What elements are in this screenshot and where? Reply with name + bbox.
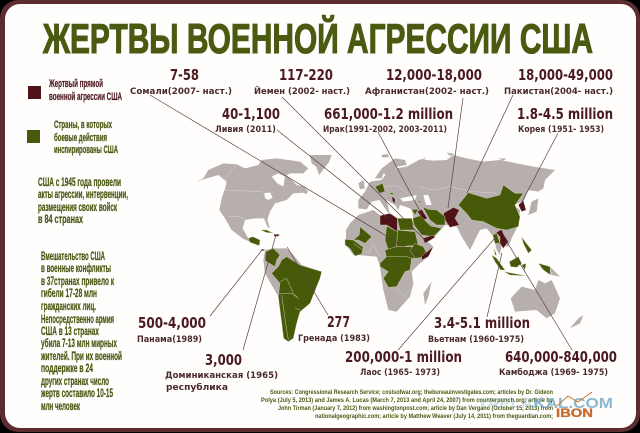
label: Dominican Republic: 3,000 [205, 351, 242, 369]
label: Yemen [254, 66, 350, 97]
label: Grenada: Гренада (1983) [298, 334, 370, 344]
map: South America [263, 248, 322, 342]
label: Libya: Ливия (2011) [215, 125, 276, 135]
world map [197, 153, 583, 342]
watermark: IBON [556, 406, 593, 420]
label: Afghanistan: 12,000-18,000 [386, 66, 482, 84]
text block: casualties summary: жертв составило 10-15 [40, 386, 113, 400]
legend text: direct aggression [48, 78, 122, 103]
legend text: inspired conflicts: инспирированы США [54, 144, 118, 156]
text block: acts of aggression: США с 1945 года провели [38, 175, 121, 189]
sources: John Tirman (January 7, 2012) from washingtonpost.com; article by Dan Vergano (October 15, 2013) from [278, 406, 553, 412]
legend swatch: direct aggression [28, 86, 41, 99]
label: Cambodia [499, 348, 617, 378]
text block: casualties summary: других странах число [41, 374, 109, 388]
map: North and Central America [197, 155, 332, 251]
legend text: direct aggression: военной агрессии США [49, 91, 122, 103]
sources: nationalgeographic.com; article by Matthew Weaver (July 14, 2011) from theguardian.com; [315, 414, 553, 420]
text block: casualties summary: жителей. При их военной [40, 349, 122, 363]
label: Libya: 40-1,100 [222, 105, 280, 123]
label: Dominican Republic: республика [166, 382, 228, 393]
sources [261, 390, 554, 420]
label: Somalia [130, 66, 232, 97]
label: Laos: 200,000-1 million [345, 348, 462, 366]
label: Yemen: 117-220 [279, 66, 333, 84]
label: Vietnam: 3.4-5.1 million [434, 314, 530, 332]
legend swatch: inspired conflicts [27, 130, 40, 143]
text block: casualties summary: убила 7-13 млн мирных [41, 336, 117, 350]
label: Libya [215, 105, 280, 135]
label: Laos: Лаос (1965- 1973) [360, 368, 440, 378]
legend text: inspired conflicts: боевые действия [54, 132, 107, 144]
map: Eurasia [358, 153, 555, 255]
label: Iraq: 661,000-1.2 million [324, 105, 453, 123]
text block: acts of aggression: в 84 странах [38, 212, 83, 226]
label: Afghanistan: Афганистан(2002- наст.) [365, 87, 489, 97]
watermark: YAPLA KAL.COM [477, 395, 613, 412]
label: Iraq: Ирак(1991-2002, 2003-2011) [323, 125, 447, 135]
label: Korea: Корея (1951- 1953) [518, 125, 604, 135]
legend text: direct aggression: Жертвый прямой [48, 78, 103, 90]
label: Vietnam [428, 314, 530, 345]
text block: casualties summary: США в 13 странах [41, 324, 99, 338]
text block: casualties summary: Вмешательство США [41, 249, 105, 263]
label: Cambodia: Камбоджа (1969- 1975) [499, 367, 608, 378]
text block: casualties summary: гибели 17-28 млн [41, 286, 97, 300]
label: Panama: Панама(1989) [137, 335, 202, 345]
label: Somalia: Сомали(2007- наст.) [130, 87, 232, 97]
legend [27, 78, 122, 156]
label: Pakistan: 18,000-49,000 [518, 66, 613, 84]
label: Grenada: 277 [327, 313, 350, 331]
text block: casualties summary [40, 249, 122, 413]
text block: casualties summary: поддержке в 24 [41, 361, 93, 375]
label: Somalia: 7-58 [170, 66, 199, 84]
text block: casualties summary: млн человек [41, 399, 81, 413]
label: Afghanistan [365, 66, 489, 97]
text block: casualties summary: в военные конфликты [41, 261, 111, 275]
text block: acts of aggression: акты агрессии, интервенции, [38, 187, 128, 201]
label: Dominican Republic [165, 351, 278, 393]
label: Yemen: Йемен (2002- наст.) [254, 85, 350, 97]
label: Iraq [323, 105, 453, 135]
text block: acts of aggression [38, 175, 128, 226]
sources: Sources: Congressional Research Service; costsofwar.org; thebureauinvestigates.com; articles by Dr. Gideon [270, 390, 553, 396]
leader lines [150, 95, 572, 350]
label: Grenada [298, 313, 370, 344]
map: Southeast Asia and Oceania [492, 229, 583, 328]
label: Pakistan: Пакистан(2004- наст.) [504, 87, 613, 97]
sources: Polya (July 5, 2013) and James A. Lucas (March 7, 2013 and April 24, 2007) from counterpunch.org; article by [261, 398, 554, 404]
legend text: inspired conflicts [54, 119, 118, 156]
label: Korea [517, 105, 613, 135]
watermark [477, 392, 613, 420]
label: Laos [345, 348, 462, 378]
label: Korea: 1.8-4.5 million [517, 105, 613, 123]
label: Vietnam: Вьетнам (1960-1975) [428, 335, 524, 345]
label: Dominican Republic: Доминиканская (1965) [165, 371, 278, 381]
text block: casualties summary: гражданских лиц. [41, 299, 96, 313]
label: Pakistan [504, 66, 613, 97]
text block: acts of aggression: размещения своих войск [38, 200, 118, 214]
map: Africa [345, 210, 433, 312]
text block: casualties summary: в 37странах привело к [41, 274, 115, 288]
label: Panama [137, 314, 206, 345]
legend text: inspired conflicts: Страны, в которых [54, 119, 112, 131]
label: Panama: 500-4,000 [138, 314, 206, 332]
text block: casualties summary: Непосредственно армия [41, 312, 114, 326]
